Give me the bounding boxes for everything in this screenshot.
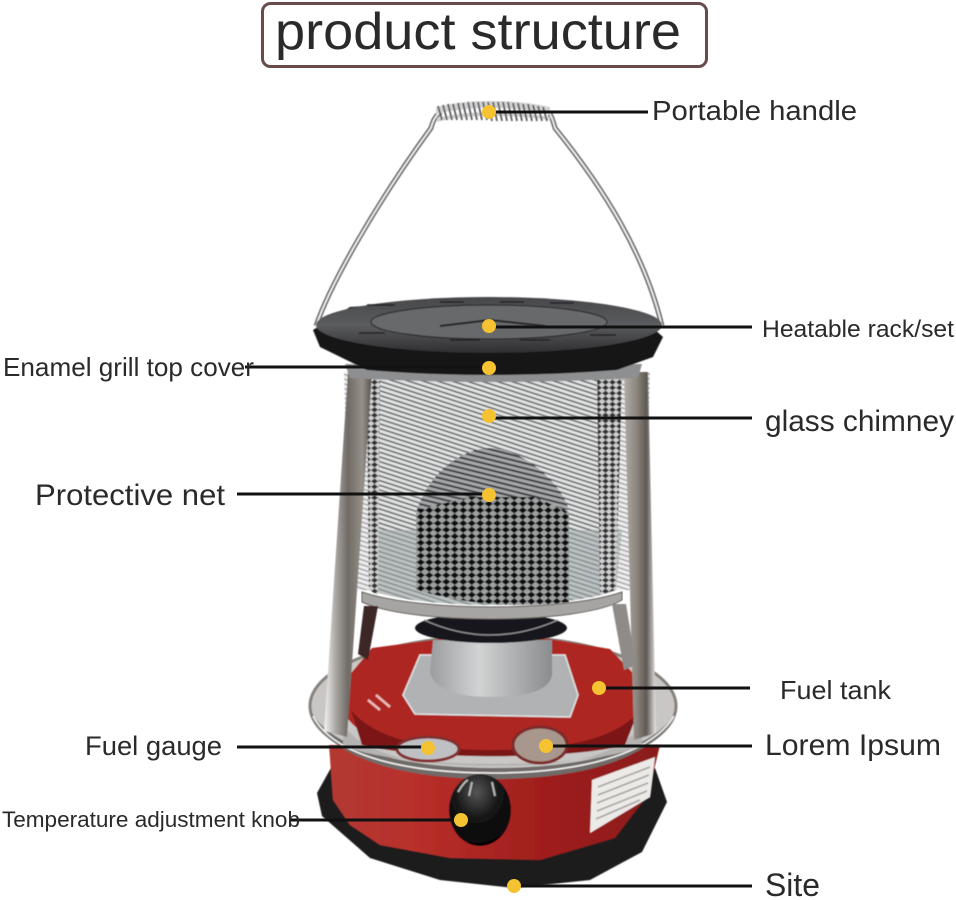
icon: fuel gauge — [397, 737, 459, 761]
callout line: portable handle — [489, 110, 648, 114]
panel: specification sticker — [590, 757, 655, 833]
panel: steel legs — [324, 372, 656, 740]
callout line: fuel tank — [599, 686, 750, 690]
panel: base tray — [317, 766, 667, 888]
panel: mesh shelf — [362, 592, 622, 619]
label: glass chimney: glass chimney — [765, 405, 954, 438]
icon: inner burner dome — [416, 448, 569, 605]
icon: portable handle — [316, 101, 662, 326]
panel: protective mesh — [344, 372, 650, 605]
icon: burner neck — [430, 640, 552, 697]
icon: mounting plate — [403, 655, 578, 717]
label: protective net: Protective net — [35, 479, 226, 512]
callout line: site — [514, 884, 752, 888]
markers: yellow dots — [421, 105, 606, 893]
panel: enamel lid — [313, 297, 663, 375]
panel: red fuel tank body — [329, 745, 660, 860]
callout line: fuel gauge — [237, 746, 428, 748]
title: product structure — [275, 3, 681, 61]
icon: burner collar — [415, 613, 567, 643]
panel: red tank top — [343, 639, 641, 756]
label: lorem ipsum: Lorem Ipsum — [765, 729, 941, 762]
callout line: temperature knob — [290, 818, 461, 822]
label: heatable rack/set: Heatable rack/set — [762, 316, 954, 343]
icon: filler cap — [513, 727, 567, 763]
icon: temperature knob — [449, 774, 511, 846]
label: temperature adjustment knob: Temperature adjustment knob — [2, 807, 300, 832]
kerosene heater illustration — [310, 101, 676, 888]
callout line: lorem ipsum — [546, 744, 752, 748]
leader lines and markers — [237, 105, 752, 893]
callout line: enamel cover — [245, 366, 489, 368]
panel: chrome inner strip — [343, 725, 642, 766]
label: fuel gauge: Fuel gauge — [85, 731, 222, 761]
label: fuel tank: Fuel tank — [780, 675, 892, 705]
label: portable handle: Portable handle — [652, 95, 857, 126]
callout line: heatable rack — [489, 326, 752, 328]
callout line: glass chimney — [489, 416, 752, 420]
callout line: protective net — [237, 492, 489, 496]
panel: metal ring — [310, 636, 676, 776]
panel: lid ring — [345, 364, 642, 382]
label: enamel grill top cover: Enamel grill top cover — [3, 352, 254, 382]
